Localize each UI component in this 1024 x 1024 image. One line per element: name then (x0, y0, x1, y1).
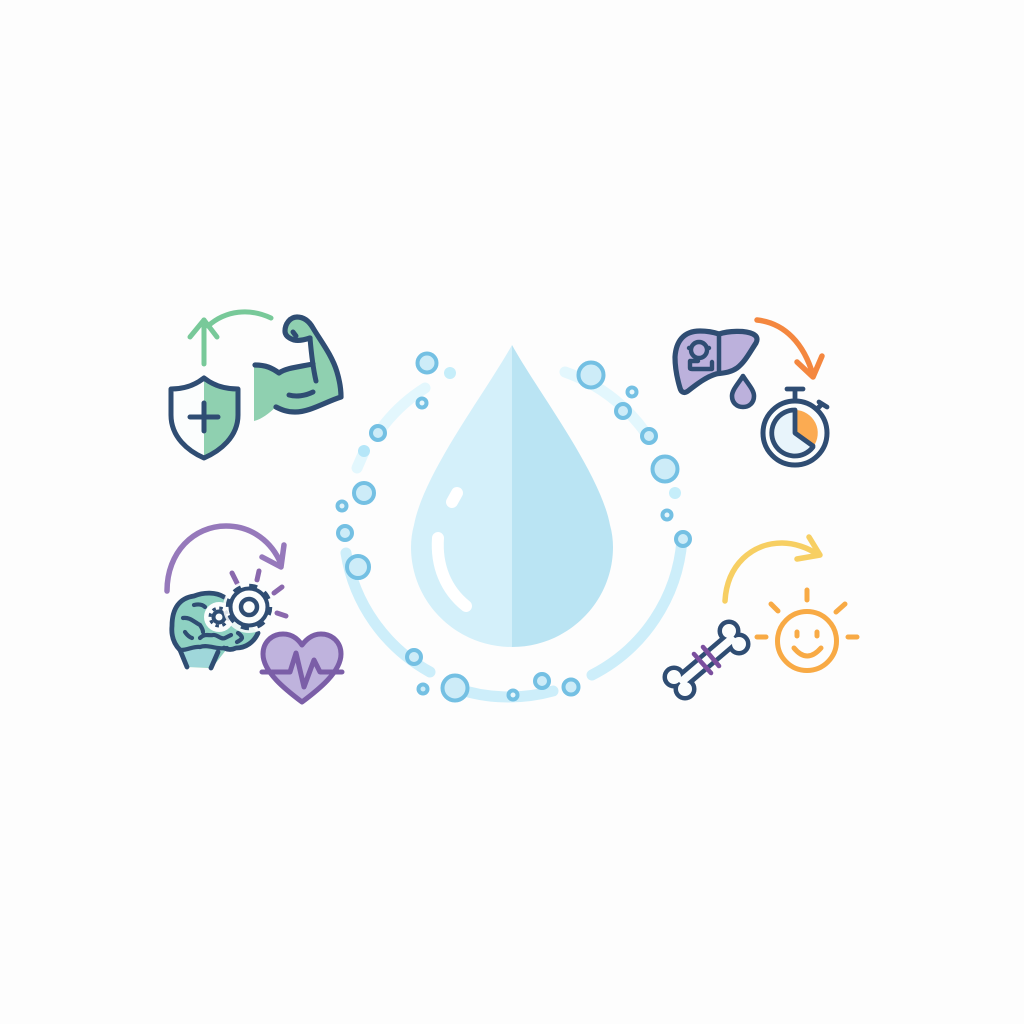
icon: bone, sun and arrow (663, 537, 857, 700)
icon: liver, drop and stopwatch (675, 320, 827, 465)
icon: shield with upward arrow and muscle (171, 312, 341, 458)
shield (171, 378, 238, 458)
rays (232, 571, 286, 616)
orange arrow (757, 320, 822, 377)
stopwatch (763, 389, 827, 465)
flexed muscle (254, 317, 341, 421)
drop highlights (438, 493, 466, 606)
liver (675, 331, 757, 392)
brain (172, 581, 275, 668)
central water drop (411, 345, 613, 647)
bone (663, 620, 750, 700)
green arrow (190, 312, 271, 364)
yellow arrow (725, 537, 820, 601)
icon: brain, gears and heart (167, 526, 342, 702)
purple arrow (167, 526, 284, 591)
dashed ring around the drop (346, 372, 682, 697)
bubbles (338, 354, 690, 700)
heart with pulse (262, 634, 342, 702)
gears (204, 602, 234, 632)
smiling sun (757, 590, 857, 670)
small drop (732, 376, 754, 407)
